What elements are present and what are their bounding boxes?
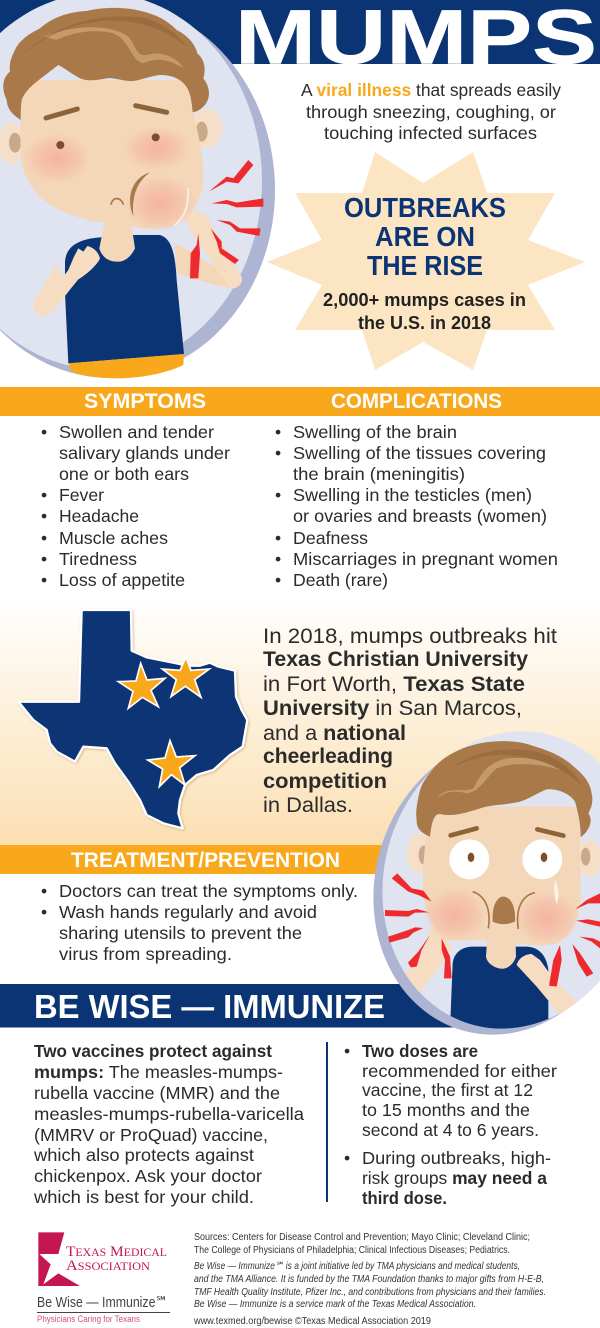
symptoms list: •: [41, 422, 47, 442]
callout heading: ARE ON: [375, 221, 475, 252]
Texas outbreaks text: and a national: [263, 722, 406, 745]
vaccines text: which also protects against: [33, 1145, 254, 1165]
doses list: second at 4 to 6 years.: [362, 1120, 539, 1140]
complications list: •: [275, 549, 281, 569]
symptoms list: •: [41, 485, 47, 505]
complications list: •: [275, 422, 281, 442]
treatment list: •: [41, 902, 47, 922]
complications list: •: [275, 485, 281, 505]
doses list: •: [344, 1041, 350, 1061]
star: Fort Worth: [118, 663, 165, 708]
complications list: or ovaries and breasts (women): [293, 506, 547, 526]
complications list: Swelling of the tissues covering: [293, 443, 546, 463]
vaccines text: [33, 1041, 304, 1207]
vaccines text: (MMRV or ProQuad) vaccine,: [34, 1125, 268, 1145]
complications list: •: [275, 443, 281, 463]
symptoms list: •: [41, 549, 47, 569]
section bar: symptoms and complications: SYMPTOMS: [84, 390, 206, 413]
symptoms list: Fever: [59, 485, 104, 505]
complications list: •: [275, 570, 281, 590]
symptoms list: •: [41, 528, 47, 548]
sources and credits: TMF Health Quality Institute, Pfizer Inc., and contributions from physicians and their families.: [194, 1287, 546, 1298]
treatment list: virus from spreading.: [59, 944, 232, 964]
complications list: Swelling of the brain: [293, 422, 457, 442]
logo: Texas Medical Association: Physicians Caring for Texans: [37, 1314, 140, 1324]
vaccines text: rubella vaccine (MMR) and the: [34, 1083, 280, 1103]
treatment list: Wash hands regularly and avoid: [59, 902, 317, 922]
callout statistic: the U.S. in 2018: [358, 312, 491, 333]
intro text: through sneezing, coughing, or: [306, 102, 556, 122]
logo: Texas Medical Association: [37, 1232, 170, 1324]
callout statistic: 2,000+ mumps cases in: [323, 289, 526, 310]
title banner: [0, 0, 600, 80]
sources and credits: Sources: Centers for Disease Control and Prevention; Mayo Clinic; Cleveland Clinic;: [194, 1232, 530, 1243]
symptoms list: •: [41, 570, 47, 590]
gradient band: [0, 598, 600, 846]
vaccines text: which is best for your child.: [33, 1187, 254, 1207]
doses list: [344, 1041, 557, 1208]
vaccines text: chickenpox. Ask your doctor: [34, 1166, 262, 1186]
star: Dallas: [162, 657, 209, 697]
sources and credits: The College of Physicians of Philadelphia; Clinical Infectious Diseases; Pediatrics.: [194, 1245, 510, 1256]
callout heading: THE RISE: [367, 250, 483, 281]
sources and credits: www.texmed.org/bewise ©Texas Medical Association 2019: [193, 1316, 431, 1327]
sources and credits: Be Wise — Immunize℠ is a joint initiative led by TMA physicians and medical students,: [194, 1261, 520, 1272]
logo: Texas Medical Association: Be Wise — Immunize℠: [37, 1294, 168, 1311]
symptoms list: Tiredness: [59, 549, 137, 569]
Texas outbreaks text: in Dallas.: [263, 794, 353, 817]
Be Wise banner: BE WISE — IMMUNIZE: [34, 988, 385, 1025]
Texas outbreaks text: In 2018, mumps outbreaks hit: [263, 625, 557, 648]
vaccines text: mumps: The measles-mumps-: [34, 1062, 283, 1082]
Texas outbreaks text: cheerleading: [263, 745, 393, 768]
doses list: recommended for either: [362, 1061, 557, 1081]
vaccines text: Two vaccines protect against: [34, 1041, 272, 1061]
symptoms list: Loss of appetite: [59, 570, 185, 590]
Texas outbreaks text: Texas Christian University: [263, 648, 528, 671]
starburst callout: [267, 152, 585, 370]
treatment list: •: [41, 881, 47, 901]
Texas outbreaks text: competition: [263, 770, 387, 793]
map of Texas with outbreak stars: [18, 610, 247, 828]
symptoms list: Muscle aches: [59, 528, 168, 548]
Texas outbreaks text: University in San Marcos,: [263, 697, 522, 720]
sources and credits: and the TMA Alliance. It is funded by the TMA Foundation thanks to major gifts from H-E-B,: [194, 1274, 544, 1285]
section bar: symptoms and complications: [0, 387, 600, 416]
Texas outbreaks text: [263, 625, 557, 817]
complications list: Miscarriages in pregnant women: [293, 549, 558, 569]
complications list: Deafness: [293, 528, 368, 548]
treatment list: [41, 881, 358, 964]
doses list: Two doses are: [362, 1041, 478, 1061]
complications list: Swelling in the testicles (men): [293, 485, 532, 505]
symptoms list: one or both ears: [59, 464, 189, 484]
doses list: to 15 months and the: [362, 1100, 530, 1120]
section bar: treatment and prevention: TREATMENT/PREVENTION: [71, 849, 340, 872]
divider: [326, 1042, 328, 1202]
logo: Texas Medical Association: ASSOCIATION: [66, 1258, 151, 1274]
complications list: the brain (meningitis): [293, 464, 465, 484]
symptoms list: •: [41, 506, 47, 526]
intro text: [301, 80, 561, 143]
star: San Marcos: [148, 741, 195, 787]
sources and credits: [193, 1232, 546, 1327]
complications list: [275, 422, 558, 590]
symptoms list: salivary glands under: [59, 443, 230, 463]
symptoms list: Swollen and tender: [59, 422, 214, 442]
illustration: boy with swollen cheek: [0, 0, 275, 378]
symptoms list: Headache: [59, 506, 139, 526]
doses list: During outbreaks, high-: [362, 1148, 551, 1168]
callout heading: [344, 192, 506, 281]
doses list: vaccine, the first at 12: [362, 1080, 533, 1100]
treatment list: Doctors can treat the symptoms only.: [59, 881, 358, 901]
callout statistic: [323, 289, 526, 333]
complications list: Death (rare): [293, 570, 388, 590]
intro text: A viral illness that spreads easily: [301, 80, 561, 100]
section bar: treatment and prevention: [0, 845, 385, 874]
illustration: boy with swollen cheeks: [373, 732, 600, 1035]
section bar: symptoms and complications: COMPLICATIONS: [331, 390, 502, 413]
sources and credits: Be Wise — Immunize is a service mark of the Texas Medical Association.: [194, 1299, 476, 1310]
symptoms list: [41, 422, 230, 590]
logo: Texas Medical Association: TEXAS MEDICAL: [66, 1244, 167, 1260]
Texas outbreaks text: in Fort Worth, Texas State: [263, 673, 525, 696]
Be Wise banner: [0, 984, 480, 1028]
doses list: third dose.: [362, 1188, 447, 1208]
doses list: risk groups may need a: [362, 1168, 547, 1188]
complications list: •: [275, 528, 281, 548]
vaccines text: measles-mumps-rubella-varicella: [34, 1104, 304, 1124]
treatment list: sharing utensils to prevent the: [59, 923, 302, 943]
doses list: •: [344, 1148, 350, 1168]
intro text: touching infected surfaces: [324, 123, 537, 143]
callout heading: OUTBREAKS: [344, 192, 506, 223]
